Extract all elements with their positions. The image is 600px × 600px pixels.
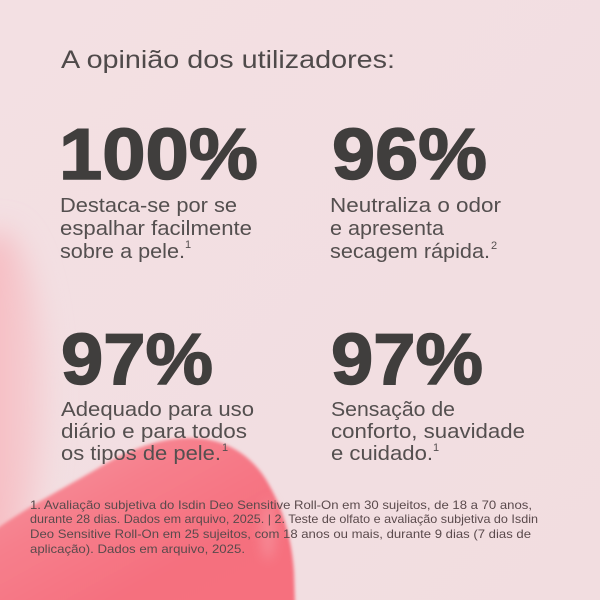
stat: 96%: 96% — [332, 115, 487, 195]
stat: 97% comfort: 1 — [433, 442, 439, 454]
stat: 97% comfort: Sensação de — [331, 399, 455, 421]
title: A opinião dos utilizadores: — [61, 46, 395, 74]
stat: 97% daily use: 97% — [61, 320, 213, 400]
pink product blob — [0, 438, 295, 600]
stat: 96%: e apresenta — [330, 218, 445, 240]
footnote: durante 28 dias. Dados em arquivo, 2025. | 2. Teste de olfato e avaliação subjetiva do Isdin — [30, 512, 538, 526]
stat: 97% comfort: 97% — [331, 320, 483, 400]
stat: 100%: 100% — [59, 115, 258, 195]
stat: 96%: 2 — [491, 240, 497, 252]
stat: 100%: 1 — [185, 239, 191, 251]
stat: 97% daily use: diário e para todos — [61, 421, 247, 443]
stat: 96%: Neutraliza o odor — [330, 195, 501, 217]
stat: 96%: secagem rápida. — [330, 241, 490, 263]
footnote: 1. Avaliação subjetiva do Isdin Deo Sensitive Roll-On em 30 sujeitos, de 18 a 70 anos, — [30, 498, 532, 512]
stat: 97% comfort: e cuidado. — [331, 443, 433, 465]
stat: 97% daily use: os tipos de pele. — [61, 443, 221, 465]
stat: 97% comfort: conforto, suavidade — [331, 421, 525, 443]
footnote: Deo Sensitive Roll-On em 25 sujeitos, com 18 anos ou mais, durante 9 dias (7 dias de — [30, 527, 531, 541]
soft pink blurred shape at left — [0, 230, 46, 560]
footnote — [30, 498, 538, 556]
stat: 96% — [330, 115, 501, 263]
stat: 100%: Destaca-se por se — [60, 195, 237, 217]
stat: 97% daily use: Adequado para uso — [61, 399, 254, 421]
stat: 100% — [59, 115, 258, 263]
stat: 97% daily use — [61, 320, 254, 465]
stat: 97% daily use: 1 — [222, 442, 228, 454]
stat: 97% comfort — [331, 320, 525, 465]
stat: 100%: espalhar facilmente — [60, 218, 252, 240]
footnote: aplicação). Dados em arquivo, 2025. — [30, 542, 245, 556]
stat: 100%: sobre a pele. — [60, 241, 185, 263]
